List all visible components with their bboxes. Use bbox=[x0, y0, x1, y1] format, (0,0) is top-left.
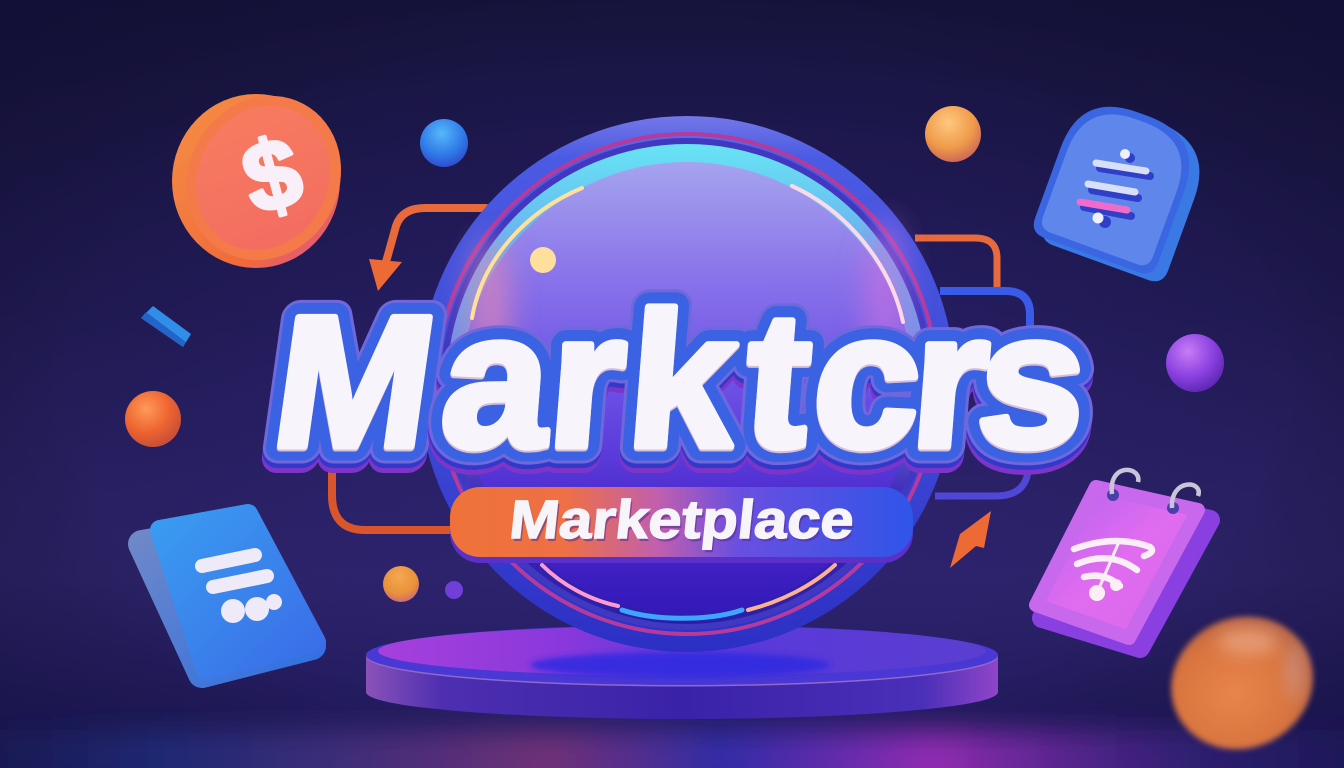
title: M bbox=[262, 279, 447, 488]
neon arc bottom left bbox=[542, 565, 618, 606]
title: M bbox=[262, 277, 448, 486]
subtitle text: Marketplace bbox=[507, 490, 857, 550]
glint bbox=[530, 247, 556, 273]
calendar rings bbox=[1112, 470, 1199, 508]
icon: blue document tab bbox=[1028, 92, 1215, 285]
title: M bbox=[262, 277, 448, 486]
title: arktcrs bbox=[435, 272, 1094, 487]
icon: purple calendar bbox=[1036, 470, 1210, 648]
ball: blue top bbox=[420, 119, 468, 167]
podium bbox=[366, 625, 998, 719]
calendar ring holes bbox=[1107, 489, 1179, 514]
arrow: orange loop top left bbox=[369, 208, 486, 291]
title: M bbox=[262, 282, 447, 491]
title: arktcrs bbox=[435, 272, 1094, 487]
neon arc bottom right bbox=[748, 565, 835, 610]
arrow: orange loop lower left bbox=[332, 450, 460, 530]
tab bars bbox=[1080, 163, 1146, 210]
arrow: small orange lower right bbox=[950, 511, 991, 568]
subtitle text shadow: Marketplace bbox=[509, 493, 859, 553]
tab bar shadows bbox=[1084, 168, 1150, 216]
subtitle pill bbox=[450, 487, 913, 563]
title: arktcrs bbox=[435, 274, 1094, 489]
sphere bbox=[419, 116, 955, 652]
ball: peach top bbox=[925, 106, 981, 162]
card dots bbox=[221, 594, 282, 623]
icon: blue bar bbox=[141, 306, 191, 347]
title: arktcrs bbox=[434, 277, 1094, 492]
title: arktcrs bbox=[434, 282, 1094, 497]
ball: purple right bbox=[1166, 334, 1224, 392]
calendar wifi symbol bbox=[1074, 541, 1152, 593]
title: M bbox=[261, 287, 446, 496]
title: M bbox=[262, 277, 448, 486]
arrow: orange and blue loops right bbox=[915, 238, 1030, 496]
title: arktcrs bbox=[435, 272, 1094, 487]
ball: large blurred orange bbox=[1149, 594, 1335, 768]
card lines bbox=[202, 555, 267, 587]
icon: dollar coin: $ bbox=[231, 115, 313, 235]
ball: orange left bbox=[125, 391, 181, 447]
neon arc right bbox=[792, 186, 903, 322]
ball: small purple bbox=[445, 581, 463, 599]
icon: dollar coin bbox=[158, 69, 370, 287]
icon: blue list card bbox=[142, 514, 316, 674]
neon arc left bbox=[472, 188, 582, 318]
neon arc bottom center bbox=[622, 610, 742, 618]
ball: small gold bbox=[383, 566, 419, 602]
sphere side glows bbox=[470, 220, 905, 380]
